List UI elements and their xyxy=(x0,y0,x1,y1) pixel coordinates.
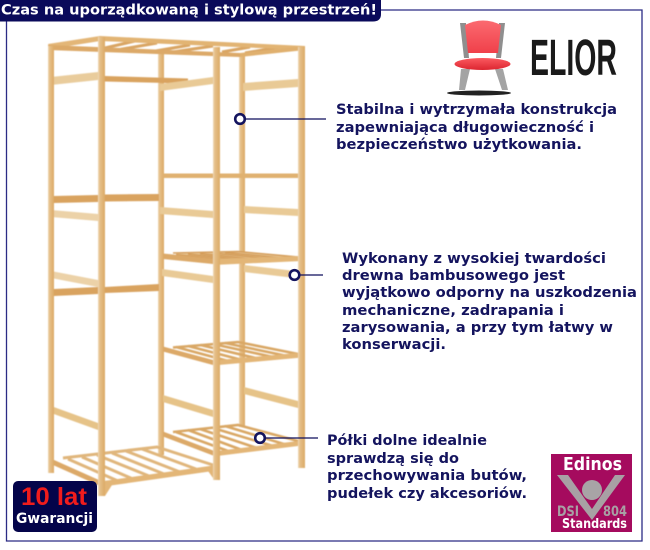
logo: Elior xyxy=(447,20,617,96)
Edinos standards badge: Edinos xyxy=(563,454,622,475)
shelf 2 xyxy=(163,342,302,366)
callout marker: construction xyxy=(235,114,326,124)
bottom shelf xyxy=(53,447,213,487)
callout marker: bamboo xyxy=(290,270,323,280)
text block: lower shelves xyxy=(327,433,527,502)
Edinos standards badge: DSI xyxy=(557,504,579,520)
text block: lower shelves: przechowywania butów, xyxy=(327,468,527,484)
text block: bamboo xyxy=(342,251,637,353)
text block: construction xyxy=(336,102,617,153)
top frame xyxy=(48,36,305,57)
Edinos standards badge: Standards xyxy=(562,517,627,532)
text block: lower shelves: Półki dolne idealnie xyxy=(327,433,487,449)
text block: lower shelves: pudełek czy akcesoriów. xyxy=(327,486,527,502)
text block: bamboo: wyjątkowo odporny na uszkodzenia xyxy=(342,285,637,301)
text block: lower shelves: sprawdzą się do xyxy=(327,451,459,467)
warranty badge: Gwarancji xyxy=(16,511,93,527)
shelf 3 xyxy=(163,425,302,456)
shelf 1 xyxy=(163,251,302,265)
warranty badge: 10 lat xyxy=(21,483,88,511)
text block: bamboo: zarysowania, a przy tym łatwy w xyxy=(342,320,613,336)
back posts xyxy=(158,53,245,455)
text block: bamboo: drewna bambusowego jest xyxy=(342,268,565,284)
callout marker: lower shelves xyxy=(255,433,318,443)
warranty badge xyxy=(13,481,97,532)
crossbars xyxy=(51,72,298,430)
Edinos standards badge: 804 xyxy=(603,504,627,520)
text block: construction: Stabilna i wytrzymała konstrukcja xyxy=(336,102,617,118)
icon: red chair xyxy=(447,20,511,96)
text block: bamboo: Wykonany z wysokiej twardości xyxy=(342,251,606,267)
post braces xyxy=(105,470,213,496)
bamboo shelving unit xyxy=(48,36,305,496)
text block: bamboo: mechaniczne, zadrapania i xyxy=(342,303,564,319)
Edinos standards badge xyxy=(551,454,632,532)
text block: construction: bezpieczeństwo użytkowania. xyxy=(336,137,582,153)
text block: construction: zapewniająca długowieczność i xyxy=(336,120,594,136)
text block: bamboo: konserwacji. xyxy=(342,337,446,353)
front posts xyxy=(48,37,305,496)
title banner: Czas na uporządkowaną i stylową przestrzeń! xyxy=(1,2,377,18)
